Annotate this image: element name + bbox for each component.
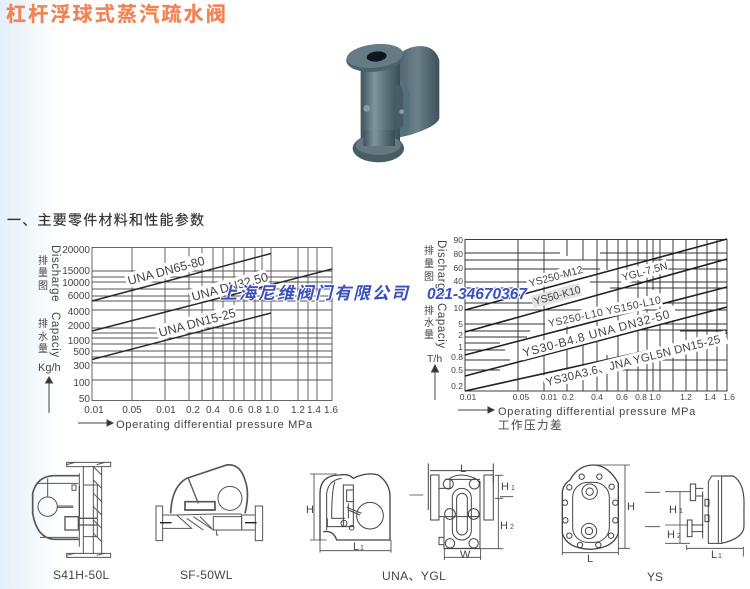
x tick labels right [460,392,735,402]
x tick labels left: 0.6 [229,405,243,416]
label: UNA, YGL: UNA、YGL [382,569,446,583]
dimension labels: YS side view [667,504,722,561]
dimension labels: UNA side view: 1 [360,545,364,552]
y tick labels left: 500 [73,347,90,358]
x tick labels right: 0.01 [541,392,558,402]
y tick labels left [62,245,90,405]
y axis title right: T/h [427,353,442,365]
x tick labels right: 1.6 [723,392,735,402]
y tick labels right: 0.8 [451,352,463,362]
series labels right: YS30A3.6、JNA YGL5N DN15-25 [545,334,722,389]
y tick labels left: 4000 [68,307,90,318]
y tick labels left: 50 [79,394,90,405]
y axis title left: 图 [38,280,48,292]
y axis title right: 量 [424,329,434,341]
dimension labels: UNA front view [460,463,515,561]
x axis title right: Operating differential pressure MPa [498,406,696,418]
x tick labels right: 1.4 [704,392,716,402]
arrow: x axis left [78,420,113,426]
y axis title left: Kg/h [38,362,61,374]
y tick labels left: 1000 [68,336,90,347]
watermark: company phone [220,284,528,303]
y tick labels right: 2 [458,330,463,340]
y tick labels right: 10 [454,303,463,313]
dimension labels: YS front view: H [627,501,635,513]
y axis title right: 水 [424,317,434,329]
y tick labels left: 10000 [62,278,90,289]
x tick labels left: 1.2 [291,405,305,416]
x tick labels left: 1.6 [324,405,338,416]
y axis title left: 水 [38,331,48,343]
x tick labels right: 0.6 [616,392,628,402]
series labels right: YGL-7.5N [621,260,669,284]
x tick labels left: 0.4 [206,405,220,416]
series labels right: YS250-L10 YS150-L10 [547,294,663,330]
dimension labels: UNA front view: W [460,549,471,561]
chart: left discharge capacity [38,245,338,431]
diagram: SF-50WL [156,465,263,541]
dimension labels: UNA side view: L [353,541,359,553]
arrow: y axis right [432,365,438,400]
y axis title left: 排 [38,254,48,267]
chart grid left [92,248,332,400]
dimension labels: UNA front view: 1 [511,485,515,492]
y tick labels left: 15000 [62,266,90,277]
chart grid right [465,240,727,391]
series labels left: UNA DN15-25 [157,306,237,340]
y axis title right: Discharge [435,240,447,297]
y tick labels right: 60 [454,263,463,273]
x tick labels left: 1.4 [307,405,321,416]
y tick labels right: 0.5 [451,365,463,375]
x tick labels right: 0.2 [562,392,574,402]
dimension labels: YS side view: 2 [677,533,681,540]
x tick labels left: 0.8 [248,405,262,416]
diagram: S41H-50L [33,462,111,557]
series labels right: YS250-M12 [528,264,584,290]
dimension labels: YS side view: 1 [718,553,722,560]
y axis title right: 量 [424,258,434,270]
diagram: UNA side view [310,474,391,553]
y tick labels right: 80 [454,249,463,259]
series labels left: UNA DN65-80 [126,254,206,288]
x tick labels left [84,405,338,416]
y tick labels left: 20000 [62,245,90,256]
x axis chinese title right: 工作压力差 [498,418,563,432]
chart curves left [92,254,332,360]
series labels left [124,253,270,340]
y tick labels right: 5 [458,319,463,329]
y tick labels right: 90 [454,235,463,245]
x tick labels left: 0.01 [156,405,176,416]
chart curves right [465,239,727,391]
y axis title right: 图 [424,271,434,283]
y axis title left: Capaciy [49,312,61,358]
y axis title right [424,240,447,365]
y tick labels left: 100 [73,378,90,389]
dimension labels: YS front view: L [587,553,593,565]
label: YS: YS [647,570,663,584]
dimension labels: UNA front view: L [460,463,466,475]
icon: steam trap valve photo [345,41,439,162]
x tick labels left: 1.0 [265,405,279,416]
y axis title right: 排 [424,304,434,317]
y tick labels right [451,235,463,391]
y axis title left: 量 [38,267,48,279]
x tick labels left: 0.05 [122,405,142,416]
x tick labels right: 1.2 [680,392,692,402]
series labels left: UNA DN32.50 [190,270,270,304]
dimension labels: YS side view: 1 [679,508,683,515]
y axis title left: Discharge [49,245,61,302]
y tick labels left: 6000 [68,291,90,302]
dimension labels: UNA side view [306,504,364,553]
diagram: YS front view [562,465,630,555]
x axis title left: Operating differential pressure MPa [116,419,313,431]
series labels right: YS50-K10 [533,284,582,308]
x tick labels right: 0.8 [635,392,647,402]
y tick labels right: 0.2 [451,381,463,391]
x tick labels right: 1.0 [649,392,661,402]
dimension labels: UNA front view: H [501,481,509,493]
dimension labels: UNA front view: 2 [510,524,514,531]
y tick labels left: 2000 [68,321,90,332]
title: 杠杆浮球式蒸汽疏水阀 [6,2,228,26]
y axis title right: 排 [424,244,434,257]
arrow: x axis right [458,407,494,413]
y tick labels right: 1 [458,342,463,352]
dimension labels: YS side view: H [669,504,677,516]
x tick labels left: 0.2 [186,405,200,416]
x tick labels right: 0.05 [513,392,530,402]
dimension labels: UNA front view: H [500,520,508,532]
y axis title left [38,245,61,374]
series labels right: YS30-B4.8 UNA DN32-50 [521,307,672,360]
dimension labels: UNA side view: H [306,504,314,516]
dimension labels: YS side view: L [711,549,717,561]
y axis title left: 排 [38,317,48,330]
label: S41H-50L: S41H-50L [53,568,109,582]
y axis title left: 量 [38,343,48,355]
watermark: company phone: 021-34670367 [427,286,528,303]
y axis title right: Capaciy [435,303,447,349]
heading: section one: 一、主要零件材料和性能参数 [7,212,205,228]
chart: right discharge capacity [424,235,735,432]
x tick labels left: 0.01 [84,405,104,416]
y tick labels right: 40 [454,276,463,286]
x tick labels right: 0.01 [460,392,477,402]
y tick labels left: 300 [73,361,90,372]
arrow: y axis left [46,377,52,413]
diagram: UNA front view [409,463,513,560]
diagram: YS side view [645,476,744,557]
dimension labels: YS front view [587,501,635,565]
label: SF-50WL: SF-50WL [180,568,233,582]
series labels right [519,259,728,389]
watermark: company phone: 上海尼维阀门有限公司 [220,284,410,303]
x tick labels right: 0.4 [591,392,603,402]
dimension labels: YS side view: H [667,529,675,541]
